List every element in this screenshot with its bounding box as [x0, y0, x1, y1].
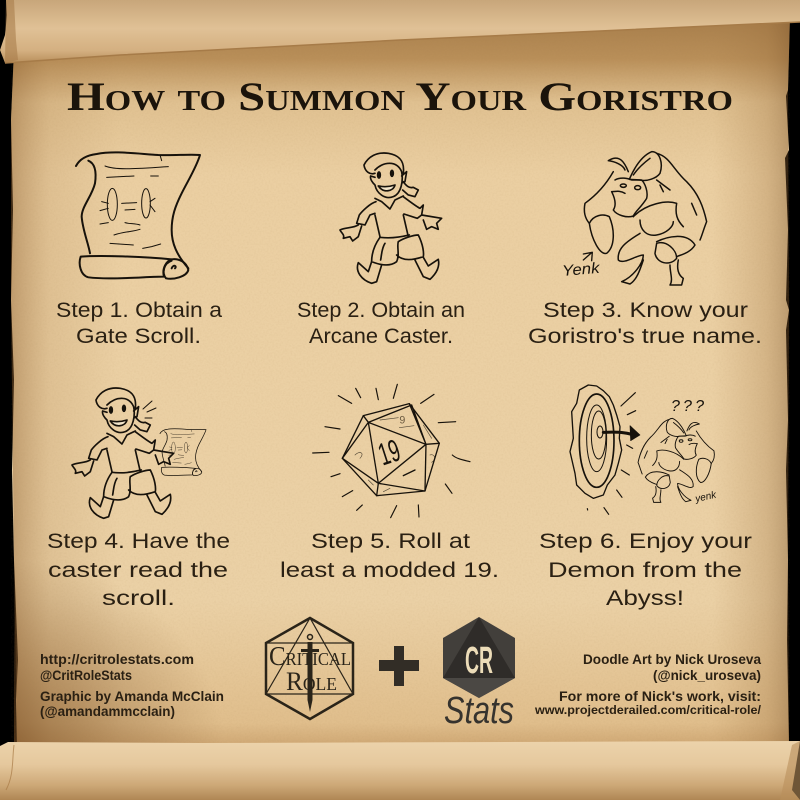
step 4 text	[47, 530, 230, 610]
footer credits right: For more of Nick's work, visit:	[559, 689, 761, 704]
panel: step 6	[539, 385, 752, 610]
step 4 text: scroll.	[102, 587, 175, 610]
footer credits left: Graphic by Amanda McClain	[40, 689, 224, 704]
question marks: ???	[671, 398, 704, 415]
plus sign	[379, 646, 419, 686]
step 3 text	[528, 299, 762, 348]
step 2 text: Step 2. Obtain an	[297, 299, 465, 322]
icon: d20 showing 19: 19	[374, 433, 404, 472]
panel: step 1	[56, 152, 222, 348]
footer credits right	[534, 652, 762, 717]
icon: d20 showing 19: 9	[399, 414, 405, 426]
icon: gate scroll	[76, 152, 200, 279]
logo: CR Stats: Stats	[444, 690, 514, 732]
panel: step 5	[280, 384, 499, 582]
logo: CR Stats: CR	[465, 640, 493, 682]
icon: abyss portal	[570, 385, 640, 514]
step 5 text: Step 5. Roll at	[311, 530, 470, 553]
step 4 text: caster read the	[48, 559, 228, 582]
logo: CR Stats	[443, 617, 515, 732]
footer credits right: www.projectderailed.com/critical-role/	[534, 703, 762, 717]
step 1 text: Gate Scroll.	[76, 325, 201, 348]
step 1 text	[56, 299, 222, 348]
icon: d20 showing 19	[313, 384, 470, 518]
step 1 text: Step 1. Obtain a	[56, 299, 222, 322]
icon: arcane caster	[340, 153, 442, 283]
step 6 text: Demon from the	[548, 559, 742, 582]
icon: caster reading scroll	[72, 388, 206, 518]
panel: step 2	[297, 153, 465, 348]
footer credits left: @CritRoleStats	[40, 668, 132, 683]
step 2 text: Arcane Caster.	[309, 325, 453, 348]
step 5 text	[280, 530, 499, 582]
footer credits left: (@amandammcclain)	[40, 704, 175, 719]
logo: Critical Role: ROLE	[286, 667, 337, 696]
panel: step 4	[47, 388, 230, 610]
icon: goristro demon	[562, 152, 707, 285]
bottom scroll roll	[0, 741, 800, 800]
step 6 text	[539, 530, 752, 610]
step 2 text	[297, 299, 465, 348]
step 3 text: Goristro's true name.	[528, 325, 762, 348]
step 5 text: least a modded 19.	[280, 559, 499, 582]
step 3 text: Step 3. Know your	[543, 299, 748, 322]
footer credits left	[40, 652, 224, 719]
step 4 text: Step 4. Have the	[47, 530, 230, 553]
icon: goristro demon: Yenk	[562, 260, 602, 280]
logo: Critical Role: CRITICAL	[269, 641, 351, 671]
footer credits right: Doodle Art by Nick Uroseva	[583, 652, 761, 667]
title: How to Summon Your Goristro	[67, 74, 733, 119]
footer credits left: http://critrolestats.com	[40, 652, 194, 667]
logo: Critical Role	[266, 618, 353, 719]
top scroll roll	[0, 0, 800, 63]
icon: portal and confused demon	[570, 385, 718, 514]
panel: step 3	[528, 152, 762, 348]
icon: portal and confused demon: yenk	[693, 490, 718, 505]
step 6 text: Step 6. Enjoy your	[539, 530, 752, 553]
step 6 text: Abyss!	[606, 587, 684, 610]
footer credits right: (@nick_uroseva)	[653, 668, 761, 683]
